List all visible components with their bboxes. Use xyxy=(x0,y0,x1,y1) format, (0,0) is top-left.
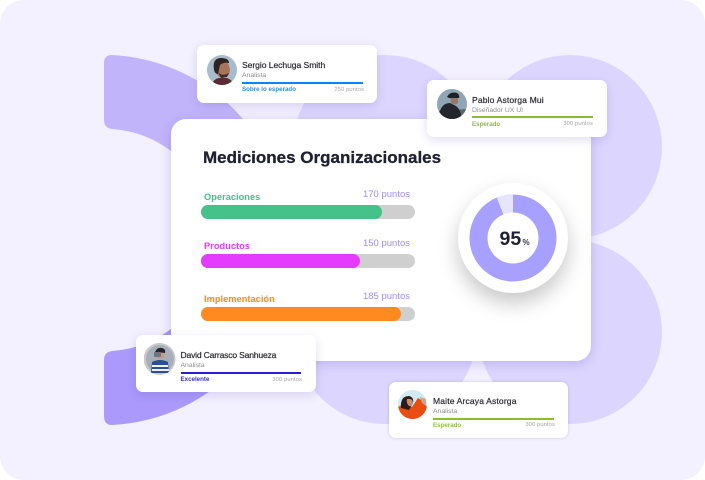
avatar: Pablo xyxy=(437,89,467,119)
value: 170 puntos: 170 puntos xyxy=(363,189,410,200)
role: Analista xyxy=(242,72,266,78)
name: Maite Arcaya Astorga xyxy=(433,396,517,406)
progress line xyxy=(242,82,363,84)
points: 250 puntos xyxy=(334,86,364,92)
value: 185 puntos: 185 puntos xyxy=(363,291,410,302)
card: Pablo Astorga Mui xyxy=(427,80,607,137)
points: 300 puntos xyxy=(563,121,593,127)
role: Analista xyxy=(433,408,457,414)
status: Excelente xyxy=(180,376,209,383)
heading: Mediciones Organizacionales xyxy=(203,148,441,167)
bar: Implementación xyxy=(201,307,415,321)
name: Sergio Lechuga Smith xyxy=(242,60,325,70)
points: 300 puntos xyxy=(272,376,302,382)
value: 150 puntos: 150 puntos xyxy=(363,238,410,249)
name: David Carrasco Sanhueza xyxy=(180,350,276,360)
points: 300 puntos xyxy=(525,422,555,428)
role: Analista xyxy=(180,362,205,368)
progress line xyxy=(180,372,301,374)
status: Esperado xyxy=(433,422,461,429)
label: Productos: Productos xyxy=(204,241,250,251)
card: Sergio Lechuga Smith xyxy=(197,45,377,103)
card: Maite Arcaya Astorga xyxy=(389,382,568,438)
panel: main measurements card xyxy=(171,119,591,361)
donut chart 95%: 95 xyxy=(499,228,521,250)
donut chart 95%: % xyxy=(522,238,529,247)
label: Operaciones: Operaciones xyxy=(204,192,260,202)
bar: Operaciones xyxy=(201,205,415,219)
progress line xyxy=(472,116,593,118)
avatar: Sergio xyxy=(207,55,237,85)
donut chart 95% xyxy=(458,183,568,293)
status: Sobre lo esperado xyxy=(242,86,296,93)
card: David Carrasco Sanhueza xyxy=(136,335,316,392)
avatar: David xyxy=(144,343,176,375)
bar: Productos xyxy=(201,254,415,268)
status: Esperado xyxy=(472,121,500,128)
name: Pablo Astorga Mui xyxy=(472,94,544,104)
progress line xyxy=(433,418,554,420)
label: Implementación: Implementación xyxy=(204,294,275,304)
avatar: Maite xyxy=(398,390,427,419)
role: Diseñador UX UI xyxy=(472,106,523,114)
